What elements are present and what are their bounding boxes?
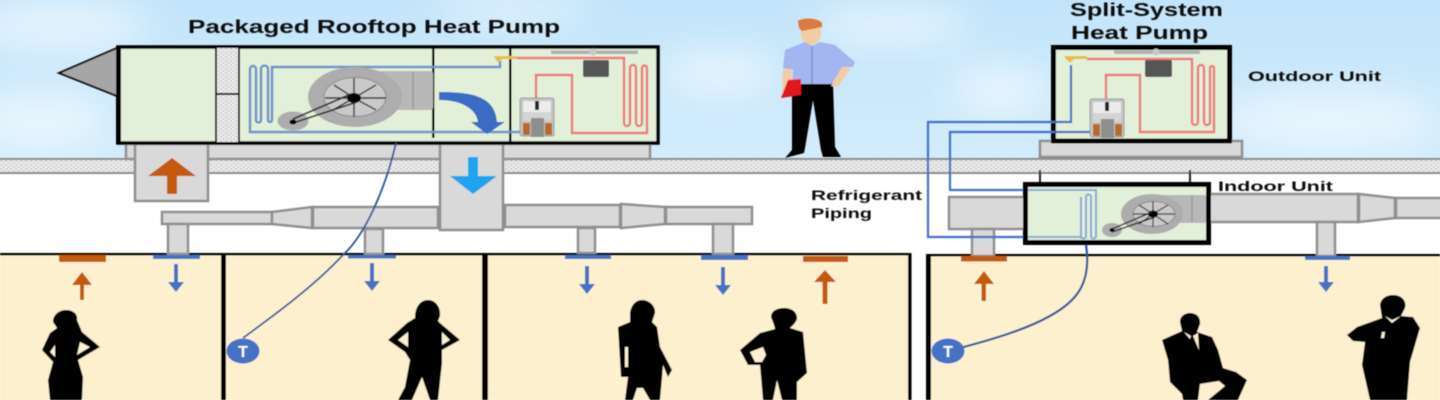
thermostat sensor right: [932, 338, 964, 364]
ductwork: split system: [949, 194, 1440, 256]
blower: [1121, 194, 1206, 234]
split-system outdoor unit: [928, 48, 1242, 237]
legs and shoes: [785, 83, 841, 158]
label: outdoor unit: Outdoor Unit: [1248, 68, 1382, 84]
fan and motor: [1114, 48, 1200, 77]
silhouette: seated man: [1162, 313, 1247, 400]
indoor coil and refrigerant line: [250, 61, 521, 132]
roof deck: [0, 159, 1440, 173]
coil refrigerant line: [1087, 59, 1214, 132]
filter bank: [216, 47, 239, 143]
airflow arrows in rooms: [72, 263, 1334, 304]
airflow arrow: [439, 92, 505, 134]
split-system indoor unit: [1026, 170, 1208, 242]
arms: [782, 67, 851, 95]
condenser fan: [551, 48, 638, 77]
outdoor coil refrigerant line: [517, 58, 647, 133]
cabinet: [1054, 48, 1230, 141]
blower outlet: [380, 71, 433, 110]
blower wheel: [308, 67, 402, 127]
head: [801, 27, 821, 45]
title: split-system heat pump: [1070, 0, 1223, 43]
title: split-system heat pump: Split-System: [1070, 0, 1223, 20]
hard hat: [798, 19, 822, 31]
shirt: [783, 42, 855, 84]
thermostat sensor right: T: [943, 344, 953, 361]
label: refrigerant piping: Piping: [811, 205, 872, 221]
title: packaged rooftop heat pump: Packaged Rooftop Heat Pump: [188, 16, 560, 37]
ductwork: packaged system: [126, 144, 752, 254]
ceiling diffusers: [59, 255, 1350, 262]
red clipboard: [781, 79, 801, 98]
indoor coil: [1028, 190, 1096, 238]
label: indoor unit: Indoor Unit: [1218, 178, 1334, 194]
silhouette: standing man: [1347, 295, 1420, 400]
compressor: [520, 98, 554, 137]
cabinet: [1026, 184, 1208, 242]
label: refrigerant piping: [811, 187, 922, 221]
equipment pad: [1040, 141, 1242, 157]
title: split-system heat pump: Heat Pump: [1071, 23, 1208, 43]
unit cabinet: [118, 47, 658, 143]
supply and return arrows in ducts: [148, 157, 497, 194]
expansion valve: [494, 56, 517, 62]
expansion valve: [1064, 56, 1087, 63]
motor and belt: [278, 94, 357, 130]
motor and belt: [1102, 212, 1155, 237]
silhouette: woman in jacket: [740, 308, 807, 400]
thermostat wiring: [243, 143, 1087, 348]
silhouette: woman second room: [388, 300, 460, 400]
sky background: [0, 0, 1440, 160]
building rooms: [0, 253, 1440, 400]
thermostat sensor left: [226, 338, 260, 364]
label: refrigerant piping: Refrigerant: [811, 187, 922, 203]
packaged rooftop unit: [59, 46, 658, 144]
compressor: [1090, 99, 1124, 138]
refrigerant lines to indoor unit: [928, 65, 1090, 237]
thermostat sensor left: T: [238, 344, 248, 361]
technician figure: [781, 19, 855, 158]
silhouette: woman left: [42, 310, 100, 400]
silhouette: woman third room: [618, 300, 672, 400]
unit hood: [59, 48, 117, 96]
